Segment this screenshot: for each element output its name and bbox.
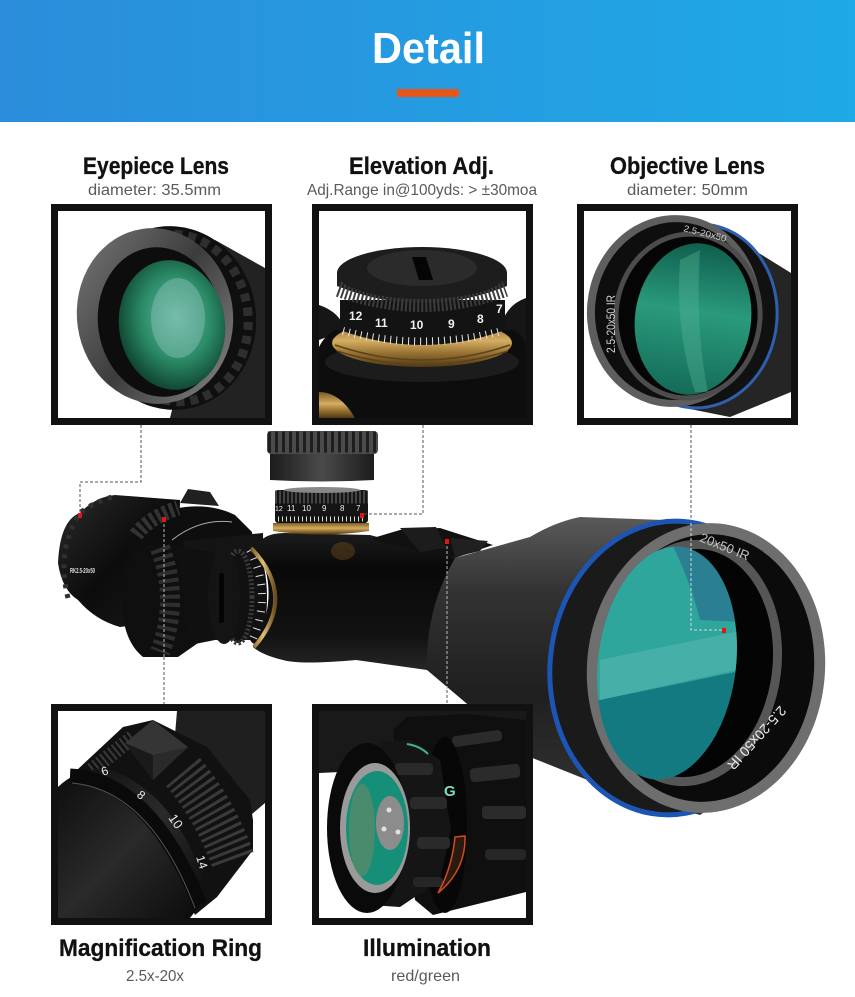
frame (54, 708, 268, 922)
callout dots (78, 513, 726, 633)
heading: Objective Lens (610, 153, 765, 180)
photo (76, 226, 265, 418)
photo: 8 (477, 312, 484, 326)
inner gray ring (589, 534, 791, 792)
title underline (397, 89, 459, 97)
photo: 2.5-20x50 IR (604, 295, 618, 353)
elevation turret: 9 (322, 504, 327, 513)
subheading: Adj.Range in@100yds: > ±30moa (307, 182, 537, 199)
leader lines (80, 425, 724, 704)
subheading: diameter: 35.5mm (88, 182, 221, 199)
panel: eyepiece lens (54, 153, 268, 422)
photo: 8 (134, 788, 148, 803)
removed turret cap (267, 431, 378, 482)
photo: 2.5-20x50 (683, 223, 728, 244)
heading: Magnification Ring (59, 935, 262, 962)
frame (316, 708, 530, 922)
photo: G (444, 783, 456, 800)
photo: 12 (349, 309, 363, 323)
photo (579, 208, 791, 417)
photo: 10 (166, 811, 186, 832)
photo: 11 (375, 316, 388, 330)
heading: Elevation Adj. (349, 153, 494, 180)
engraving bottom: 2.5-20x50 IR (724, 703, 790, 773)
elevation turret: 12 (275, 506, 283, 513)
title: Detail (372, 24, 485, 73)
windage turret (208, 548, 275, 647)
eyepiece: RK2.5-20x50 (70, 568, 95, 575)
photo: 7 (496, 302, 503, 316)
objective lens (597, 546, 737, 780)
eyepiece (58, 495, 180, 627)
frame (580, 208, 794, 422)
heading: Illumination (363, 935, 491, 962)
subheading: diameter: 50mm (627, 182, 748, 199)
magnification ring and fin (127, 489, 265, 640)
elevation turret: 11 (287, 504, 296, 513)
panel: magnification ring (54, 708, 268, 985)
photo (319, 247, 526, 418)
photo: 6 (99, 763, 111, 779)
photo: 10 (410, 318, 424, 332)
gray objective rim (575, 513, 837, 823)
elevation turret: 10 (302, 504, 311, 513)
main riflescope photo (58, 431, 837, 825)
panel: illumination (316, 708, 530, 985)
saddle and tube (253, 533, 455, 670)
blue band (538, 511, 806, 825)
highlight on saddle (331, 542, 355, 560)
frame (316, 208, 530, 422)
elevation turret: 8 (340, 504, 345, 513)
frame (54, 208, 268, 422)
panel: objective lens (579, 153, 794, 422)
illumination knob on main scope (373, 527, 493, 558)
photo: 14 (193, 854, 211, 871)
header banner (0, 0, 855, 122)
panel: elevation adjustment (307, 153, 537, 422)
black objective interior (587, 525, 825, 811)
photo (58, 711, 265, 918)
main tube and objective bell (400, 517, 780, 815)
photo: 9 (448, 317, 455, 331)
photo (319, 711, 526, 915)
subheading: red/green (391, 968, 460, 985)
elevation turret (273, 487, 369, 534)
heading: Eyepiece Lens (83, 153, 229, 180)
power cap disk (122, 545, 215, 657)
subheading: 2.5x-20x (126, 968, 184, 985)
engraving top: 20x50 IR (698, 530, 752, 563)
elevation turret: 7 (356, 504, 361, 513)
